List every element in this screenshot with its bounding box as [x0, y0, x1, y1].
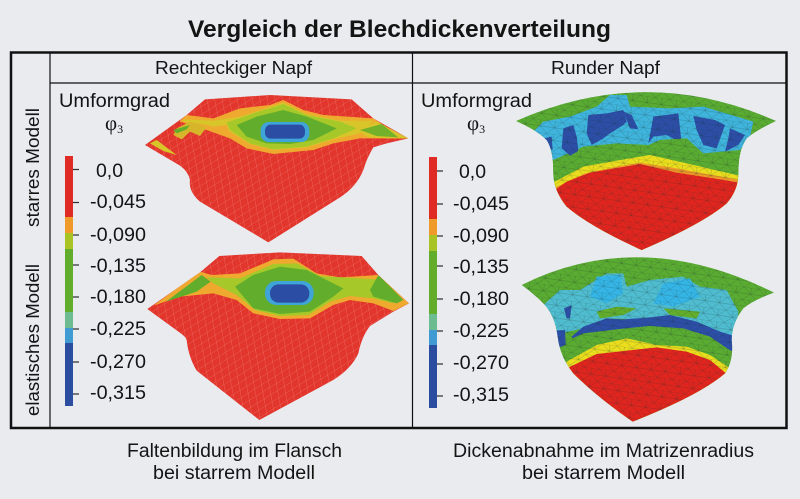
caption: right: Dickenabnahme im Matrizenradius [453, 441, 754, 462]
legend: right: -0,090 [453, 226, 509, 247]
title: Vergleich der Blechdickenverteilung [188, 16, 611, 43]
table frame [11, 52, 787, 428]
legend: left: -0,180 [90, 287, 146, 308]
caption: right: bei starrem Modell [522, 463, 685, 484]
caption: right [453, 441, 754, 484]
legend: right [421, 91, 532, 408]
legend: left: -0,315 [90, 383, 146, 404]
column heading: Runder Napf: Runder Napf [551, 58, 661, 78]
chart: rectangular cup, elastic model [140, 247, 413, 423]
legend: right: -0,225 [453, 321, 509, 342]
legend: right: -0,270 [453, 353, 509, 374]
caption: left [127, 441, 342, 484]
legend: left [59, 91, 170, 406]
legend: left: -0,225 [90, 319, 146, 340]
legend: left: 3 [117, 122, 123, 136]
legend: right: -0,315 [453, 385, 509, 406]
legend: left: φ [105, 111, 117, 135]
legend: right: 0,0 [459, 162, 486, 183]
chart: rectangular cup, rigid model [140, 90, 413, 247]
caption: left: Faltenbildung im Flansch [127, 441, 342, 462]
legend: left: -0,045 [90, 192, 146, 213]
legend: left: Umformgrad [59, 91, 170, 112]
legend: right: 3 [479, 122, 485, 136]
row heading: elastisches Modell: elastisches Modell [23, 264, 43, 416]
legend: right: -0,135 [453, 257, 509, 278]
caption: left: bei starrem Modell [153, 463, 315, 484]
legend: left: -0,135 [90, 256, 146, 277]
row heading: starres Modell: starres Modell [23, 108, 43, 227]
legend: right: -0,045 [453, 194, 509, 215]
column heading: Rechteckiger Napf: Rechteckiger Napf [155, 58, 313, 78]
legend: left: 0,0 [96, 161, 123, 182]
chart: round cup, elastic model [517, 253, 780, 427]
legend: left: -0,270 [90, 352, 146, 373]
legend: left: -0,090 [90, 225, 146, 246]
legend: right: -0,180 [453, 289, 509, 310]
chart: round cup, rigid model [516, 92, 776, 250]
legend: right: Umformgrad [421, 91, 532, 112]
legend: right: φ [467, 111, 479, 135]
